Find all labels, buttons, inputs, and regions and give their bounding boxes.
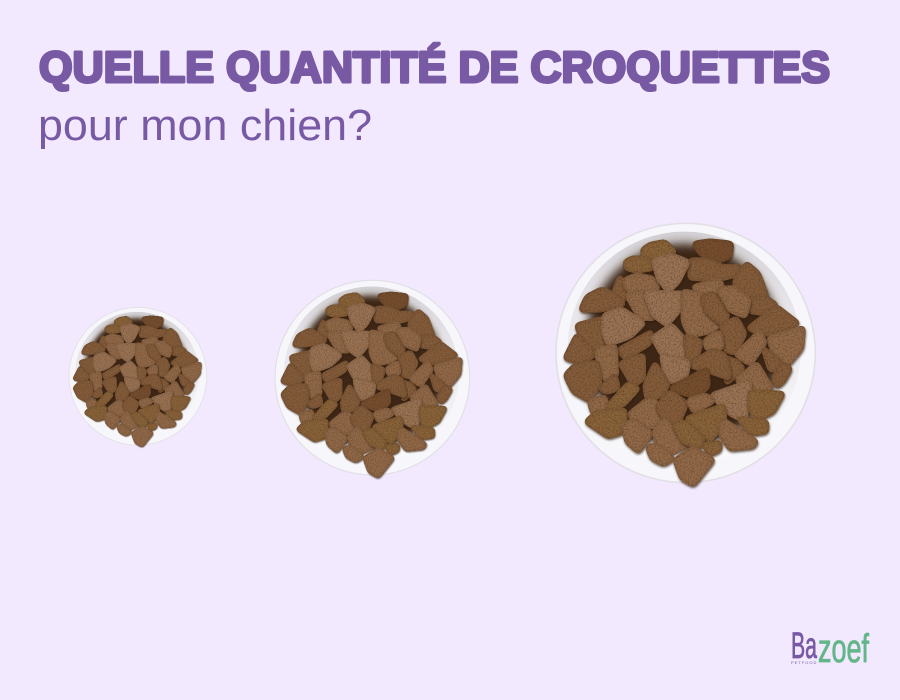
bowl inner [568, 232, 801, 465]
logo word: zoef: zoef [818, 627, 870, 671]
logo: Bazoef [791, 625, 870, 671]
bowl rim [556, 223, 815, 483]
small bowl of kibble [69, 307, 207, 446]
logo tagline: PETFOOD [791, 660, 817, 665]
logo word: Ba: Ba [791, 625, 817, 666]
kibble pile [565, 241, 803, 485]
medium bowl of kibble [275, 280, 470, 477]
subtitle: pour mon chien? [38, 101, 372, 150]
shadow under kibble [585, 243, 782, 447]
large bowl of kibble [556, 223, 815, 485]
title: QUELLE QUANTITÉ DE CROQUETTES [39, 42, 830, 92]
